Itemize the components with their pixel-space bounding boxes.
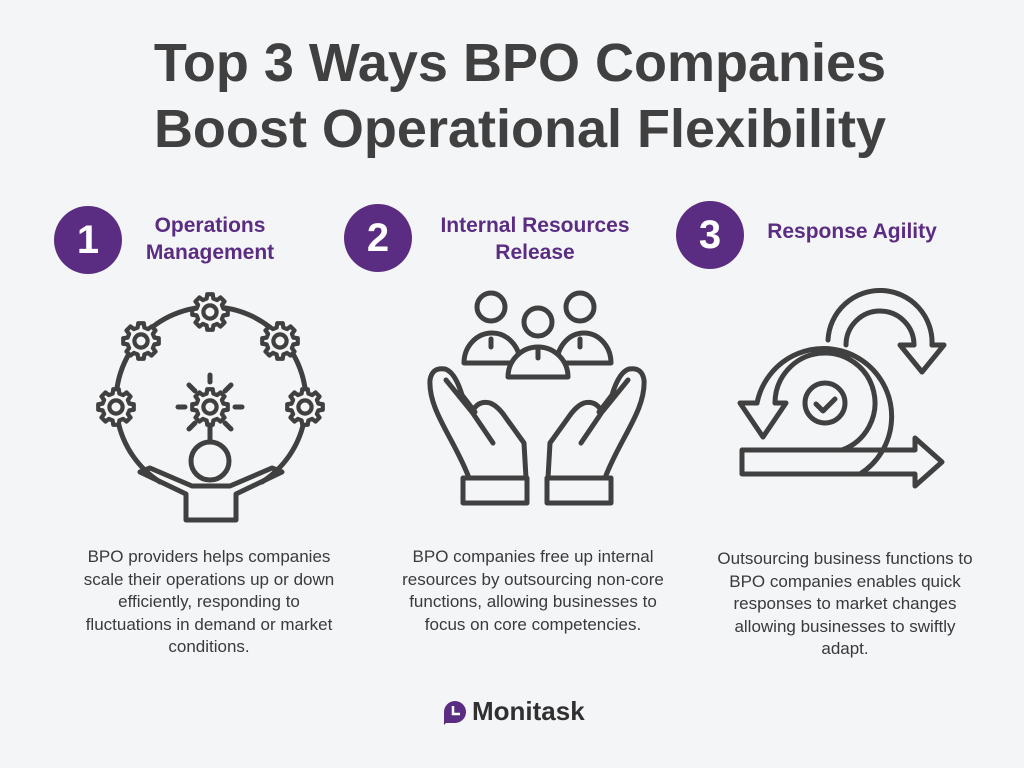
number 3: 3 <box>699 213 721 257</box>
icon: agility arrows <box>740 290 944 486</box>
heading 2 <box>440 214 630 264</box>
number 3 <box>676 201 744 269</box>
number 1 <box>54 206 122 274</box>
number 2 <box>344 204 412 272</box>
heading 2: Release <box>495 241 575 264</box>
text 1: BPO providers helps companies scale their operations up or down efficiently, responding to fluctuations in demand or market conditions. <box>84 547 334 656</box>
heading 2: Internal Resources <box>440 214 630 237</box>
icon: logo clock <box>444 701 466 725</box>
heading 1 <box>146 214 274 264</box>
number 2: 2 <box>367 216 389 260</box>
heading 1: Operations <box>155 214 265 237</box>
icon: operations juggling gears <box>98 294 323 520</box>
number 1: 1 <box>77 218 99 262</box>
heading 3: Response Agility <box>767 220 937 243</box>
heading 1: Management <box>146 241 274 264</box>
text 2: BPO companies free up internal resources by outsourcing non-core functions, allowing businesses to focus on core competencies. <box>402 547 664 634</box>
title: Boost Operational Flexibility <box>154 99 886 159</box>
title <box>154 33 886 159</box>
icon: people in hands <box>430 293 644 503</box>
text 3: Outsourcing business functions to BPO companies enables quick responses to market changes allowing businesses to swiftly adapt. <box>717 549 973 658</box>
title: Top 3 Ways BPO Companies <box>154 33 886 93</box>
logo: Monitask <box>472 696 585 726</box>
